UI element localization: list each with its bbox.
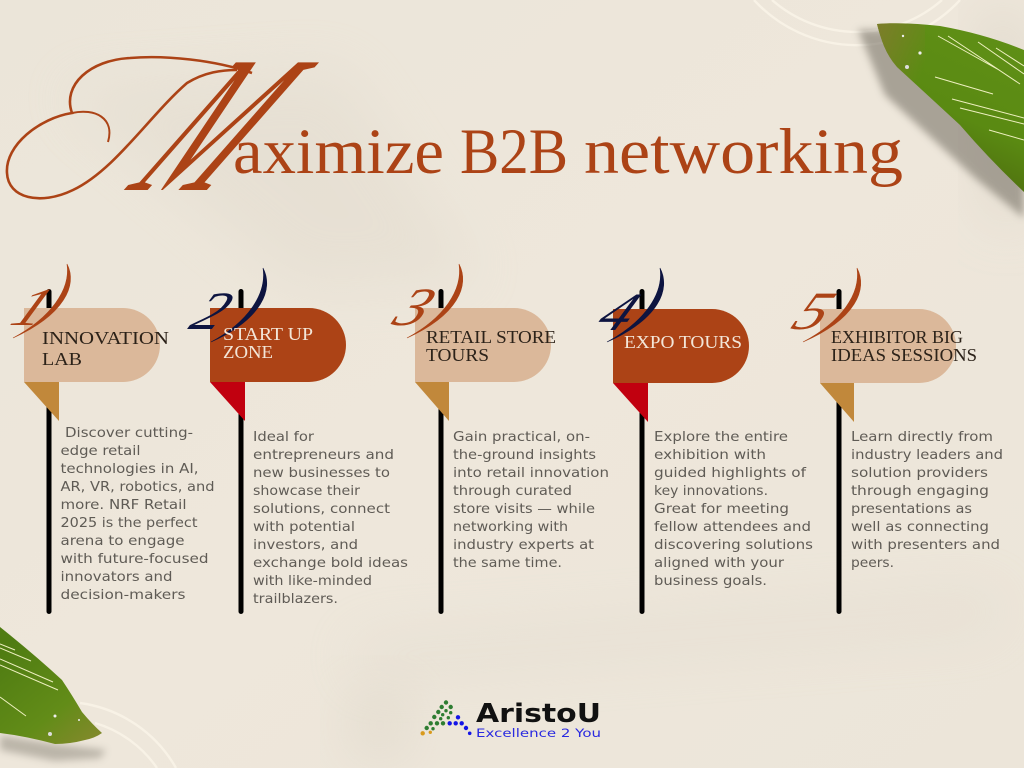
description: Explore the entire (654, 429, 788, 445)
description: store visits — while (453, 501, 595, 517)
description: decision-makers (60, 587, 186, 603)
description: key innovations. (654, 483, 768, 499)
description: entrepreneurs and (253, 447, 394, 463)
decorative arcs: top right (754, 0, 960, 45)
description: through engaging (851, 483, 989, 499)
step 4: expo tours (587, 268, 817, 614)
ribbon (820, 383, 854, 422)
leaf: bottom left (0, 627, 106, 761)
description: into retail innovation (453, 465, 609, 481)
pole (46, 289, 52, 614)
label shape (210, 308, 346, 382)
logo: AristoU (420, 699, 601, 740)
pole (640, 289, 644, 614)
title text: aximize (233, 116, 444, 188)
logo name: AristoU (476, 699, 601, 729)
heading: IDEAS SESSIONS (831, 345, 977, 365)
step 2: start up zone (180, 268, 412, 614)
description: through curated (453, 483, 572, 499)
description: with potential (253, 519, 355, 535)
description: networking with (453, 519, 568, 535)
ribbon (210, 382, 245, 421)
pole (238, 289, 244, 614)
description: exhibition with (654, 447, 766, 463)
description: fellow attendees and (654, 519, 811, 535)
heading: INNOVATION (42, 328, 169, 348)
description: more. NRF Retail (60, 497, 186, 513)
ribbon (24, 382, 59, 421)
description: presentations as (851, 501, 972, 517)
title text: B2B (460, 116, 568, 188)
title text: networking (584, 116, 903, 188)
number: 3 (382, 278, 446, 337)
description: Discover cutting- (65, 425, 193, 441)
number (382, 264, 463, 338)
description: industry experts at (453, 537, 594, 553)
title (6, 56, 902, 200)
description: Great for meeting (654, 501, 789, 517)
heading: LAB (42, 349, 82, 369)
description: edge retail (60, 443, 140, 459)
number: 1 (1, 278, 64, 337)
description: arena to engage (60, 533, 184, 549)
description: industry leaders and (851, 447, 1003, 463)
number (180, 268, 267, 342)
heading: RETAIL STORE (426, 327, 556, 347)
decorative arcs: bottom left (80, 703, 176, 768)
description: business goals. (654, 573, 767, 589)
number (10, 264, 71, 338)
description: aligned with your (654, 555, 784, 571)
pole (836, 289, 842, 614)
step 5: exhibitor big ideas sessions (782, 268, 1007, 614)
number: 2 (180, 282, 243, 341)
pole (438, 289, 444, 614)
description: solutions, connect (253, 501, 390, 517)
heading: EXPO TOURS (624, 332, 742, 352)
description: solution providers (851, 465, 988, 481)
description: Ideal for (253, 429, 314, 445)
description: trailblazers. (253, 591, 338, 607)
heading: ZONE (223, 342, 273, 362)
heading: EXHIBITOR BIG (831, 327, 963, 347)
label shape (613, 309, 749, 383)
description: new businesses to (253, 465, 390, 481)
description: guided highlights of (654, 465, 807, 481)
title capital M flourish curl (72, 112, 109, 142)
description: Gain practical, on- (453, 429, 590, 445)
description: exchange bold ideas (253, 555, 408, 571)
label shape (415, 308, 551, 382)
description: 2025 is the perfect (60, 515, 198, 531)
description: with future-focused (60, 551, 208, 567)
label shape (24, 308, 160, 382)
step 1: innovation lab (1, 264, 219, 614)
description: investors, and (253, 537, 358, 553)
number: 4 (587, 283, 650, 342)
heading: TOURS (426, 345, 489, 365)
logo mark (420, 700, 472, 736)
description: showcase their (253, 483, 360, 499)
description: well as connecting (851, 519, 989, 535)
ribbon (613, 383, 648, 422)
leaf: top right (858, 23, 1024, 218)
logo tagline: Excellence 2 You (476, 726, 601, 740)
description: the-ground insights (453, 447, 596, 463)
description: AR, VR, robotics, and (60, 479, 214, 495)
description: Learn directly from (851, 429, 993, 445)
label shape (820, 309, 956, 383)
description: innovators and (60, 569, 172, 585)
heading: START UP (223, 324, 313, 344)
description: discovering solutions (654, 537, 813, 553)
title capital M flourish (7, 57, 252, 198)
description: the same time. (453, 555, 562, 571)
number: 5 (782, 282, 845, 341)
description: peers. (851, 555, 894, 571)
title capital M: M (90, 17, 354, 233)
ribbon (415, 382, 449, 421)
description: with presenters and (851, 537, 1000, 553)
step 3: retail store tours (382, 264, 613, 614)
description: technologies in AI, (60, 461, 198, 477)
number (598, 268, 664, 342)
description: with like-minded (253, 573, 372, 589)
number (782, 268, 861, 342)
